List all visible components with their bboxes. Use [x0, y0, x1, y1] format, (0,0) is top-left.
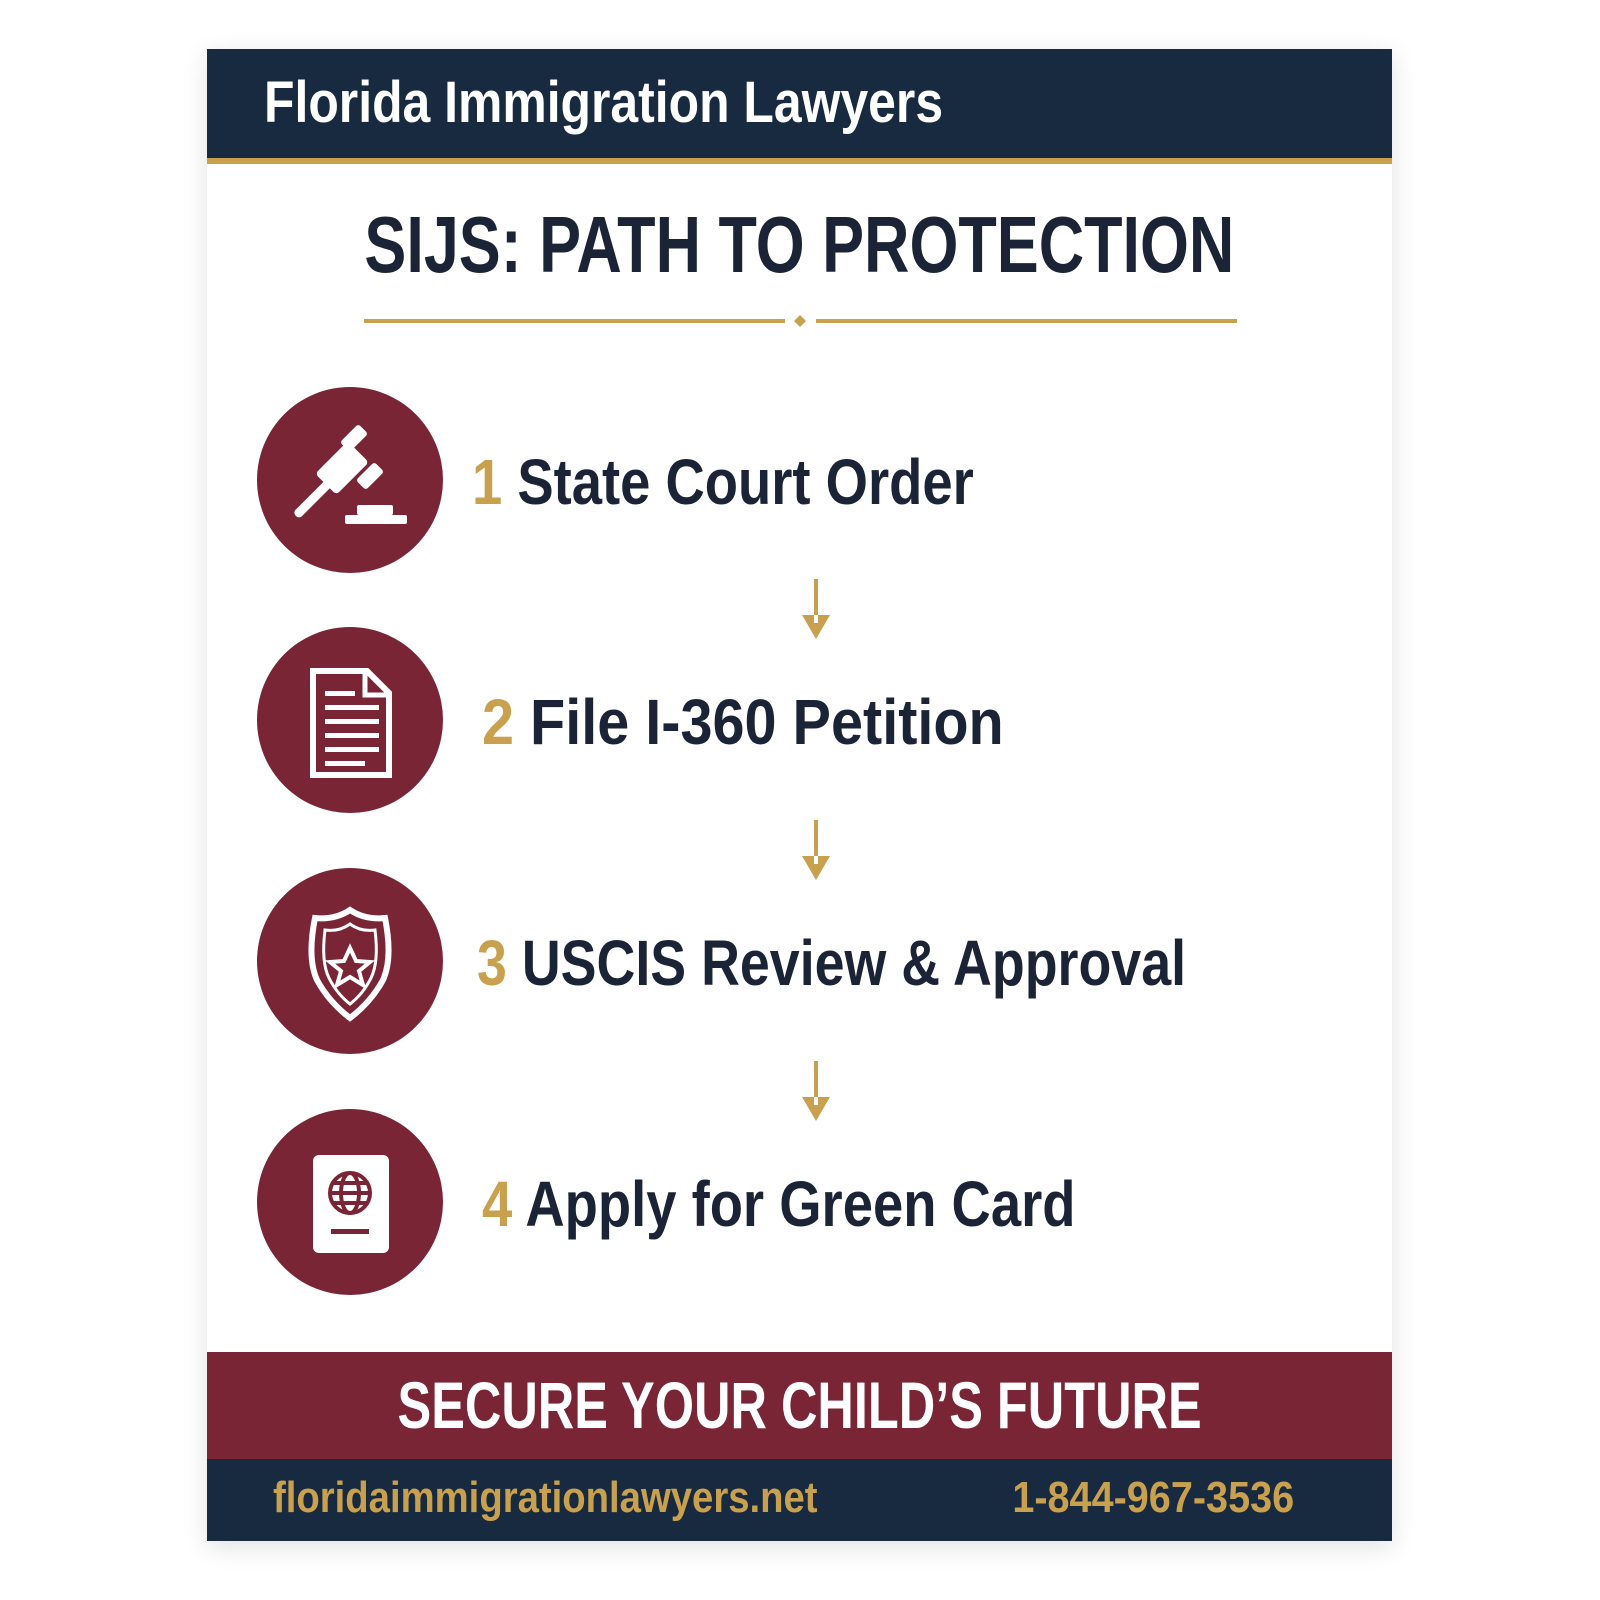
arrow [802, 820, 830, 880]
footer: 1-844-967-3536 [1012, 1473, 1294, 1522]
label: 1 State Court Order [472, 446, 974, 518]
footer [207, 1459, 1392, 1541]
title: SIJS: PATH TO PROTECTION [365, 200, 1234, 289]
arrow [802, 1061, 830, 1121]
icon: shield [257, 868, 443, 1054]
header bar [207, 49, 1392, 164]
card [207, 49, 1392, 1541]
icon: document [257, 627, 443, 813]
icon: gavel [257, 387, 443, 573]
arrow [802, 579, 830, 639]
label: 2 File I-360 Petition [482, 686, 1004, 758]
step 3 [257, 868, 1186, 1054]
label: 4 Apply for Green Card [482, 1168, 1075, 1240]
header bar: Florida Immigration Lawyers [264, 70, 943, 135]
label: 3 USCIS Review & Approval [477, 927, 1186, 999]
footer: floridaimmigrationlawyers.net [273, 1473, 818, 1522]
icon: passport [257, 1109, 443, 1295]
step 2 [257, 627, 1004, 813]
divider [364, 315, 1237, 327]
callout band: SECURE YOUR CHILD’S FUTURE [397, 1368, 1202, 1442]
callout band [207, 1352, 1392, 1459]
step 4 [257, 1109, 1075, 1295]
step 1 [257, 387, 974, 573]
